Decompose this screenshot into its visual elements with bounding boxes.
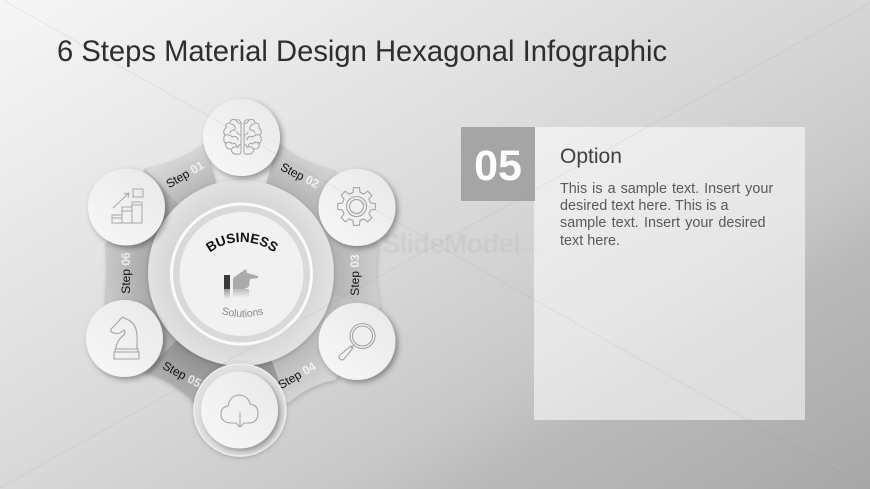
number box [461,127,535,201]
center label: solutions: Solutions [222,308,264,318]
step 2 button: gear [318,169,396,246]
icon: cloud download [221,395,258,427]
option body text [560,181,773,249]
number box: 05 [474,142,522,190]
watermark [340,220,539,259]
step 1 button: brain [203,99,280,176]
option body text: desired text here. This is a [560,198,729,214]
icon: pointing hand [224,269,258,299]
panel: option text [461,127,805,420]
icon: brain [224,119,261,154]
icon: chess knight [111,317,139,359]
option body text: sample text. Insert your desired [560,215,766,231]
option body text: This is a sample text. Insert your [560,181,773,197]
step 5 button: chess knight [86,300,163,377]
step labels [119,158,362,392]
option heading: Option [560,145,622,168]
label: step 02: Step 02 [278,160,322,191]
title: 6 Steps Material Design Hexagonal Infographic [57,36,667,68]
icon: magnifying glass [339,324,375,360]
icon: growth stairs [112,189,143,223]
label: step 06: Step 06 [119,252,133,294]
icon: gear [338,188,375,225]
step 6 button: stairs [88,168,165,246]
center disc [146,179,336,366]
step 4 button: cloud [194,364,286,456]
step 3 button: magnifier [318,303,396,380]
label: step 05: Step 05 [160,359,204,391]
hexagonal connector band [104,142,380,404]
label: step 03: Step 03 [348,254,362,296]
watermark: SlideModel.com [382,228,539,259]
label: step 04: Step 04 [276,359,319,392]
option body text: text here. [560,233,620,249]
label: step 01: Step 01 [164,158,207,191]
center heading: business: BUSINESS [206,232,278,252]
